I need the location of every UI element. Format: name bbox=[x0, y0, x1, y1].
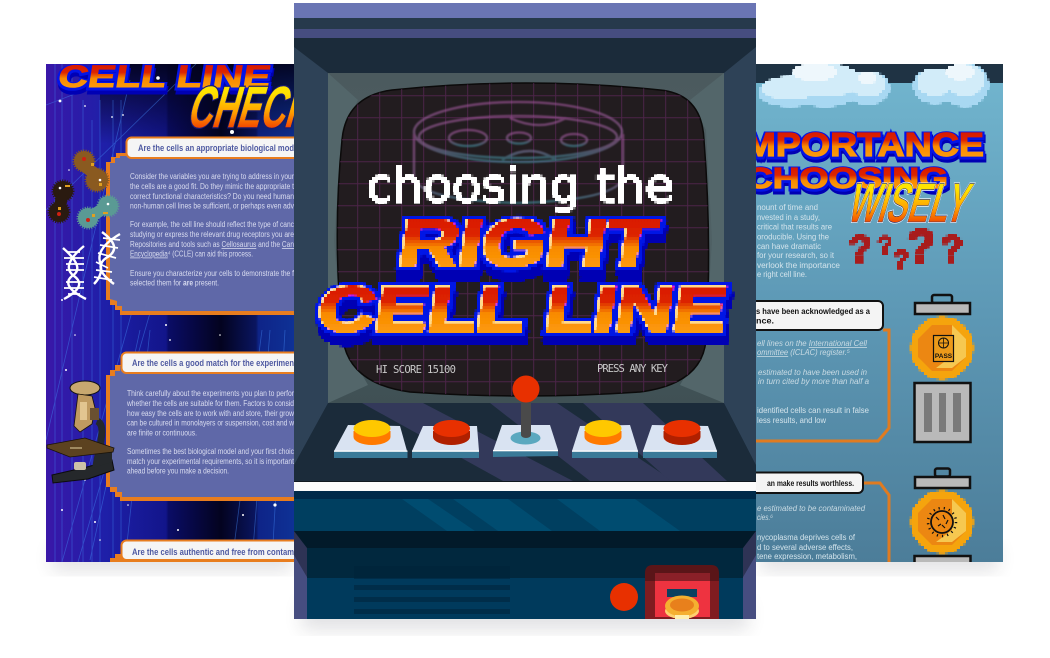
icon: red indicator dot bbox=[610, 583, 638, 611]
callout: misidentified cells: ommittee (ICLAC) register.⁵ bbox=[757, 348, 850, 357]
icon: bin with microbe coin bbox=[910, 468, 974, 576]
heading: IMPORTANCE / CHOOSING: CHOOSING bbox=[746, 164, 948, 196]
icon: pixel clouds bbox=[758, 63, 989, 107]
card: experimental match: Sometimes the best biological model and your first choic bbox=[127, 447, 294, 456]
text: press any key: PRESS ANY KEY bbox=[597, 363, 669, 375]
white divider band bbox=[294, 481, 756, 492]
shadows under the three posters bbox=[52, 545, 998, 630]
heading: CELL LINE: CELL LINE bbox=[57, 64, 274, 99]
card: authentic and contamination-free: Are the cells authentic and free from contam bbox=[132, 547, 294, 557]
heading: checklist script: CHECK bbox=[182, 74, 323, 140]
callout: misidentified cells: less results, and low bbox=[757, 416, 826, 425]
monitor bezel bbox=[328, 73, 724, 403]
heading: IMPORTANCE / CHOOSING: CHOOSING bbox=[747, 167, 949, 199]
text: intro paragraph: can have dramatic bbox=[757, 242, 821, 251]
icon: bin with passport coin bbox=[910, 295, 974, 442]
heading: CELL LINE: CELL LINE bbox=[315, 285, 734, 355]
card: experimental match bbox=[106, 352, 302, 501]
card: experimental match: how easy the cells are to work with and store, their grow bbox=[127, 409, 294, 418]
heading: choosing the: choosing the bbox=[366, 159, 674, 214]
icon: microscope bbox=[47, 381, 114, 483]
grille bbox=[354, 578, 510, 614]
heading: IMPORTANCE / CHOOSING: IMPORTANCE bbox=[735, 130, 985, 167]
card: experimental match: are finite or continuous. bbox=[127, 428, 197, 438]
callout: misidentified cells: nce. bbox=[756, 316, 774, 326]
card: biological model bbox=[106, 138, 302, 315]
icon: question marks: ? bbox=[877, 232, 893, 260]
icon: question marks bbox=[849, 228, 963, 270]
card: biological model: Repositories and tools such as Cellosaurus and the Can bbox=[130, 240, 294, 249]
card: biological model: studying or express the relevant drug receptors you are bbox=[130, 230, 294, 239]
icon: bacteria bbox=[49, 151, 118, 228]
callout: contamination: e estimated to be contaminated bbox=[757, 504, 866, 513]
panel: cell line checklist poster (left) bbox=[46, 64, 294, 562]
cabinet top bands bbox=[294, 3, 756, 403]
card: biological model: non-human cell lines be sufficient, or perhaps even adv bbox=[130, 202, 294, 210]
text: intro paragraph: for your research, so it bbox=[757, 251, 835, 260]
card: biological model: correct functional characteristics? Do you need human bbox=[130, 192, 294, 201]
card: biological model: selected them for are present. bbox=[130, 278, 219, 288]
heading: RIGHT: RIGHT bbox=[394, 207, 663, 281]
card: authentic and contamination-free bbox=[110, 540, 302, 562]
callout: misidentified cells: s have been acknowledged as a bbox=[756, 306, 870, 316]
icon: question marks: ? bbox=[848, 229, 872, 271]
lower cabinet bbox=[294, 491, 756, 619]
callout: contamination: nycoplasma deprives cells of bbox=[757, 533, 856, 542]
callout: misidentified cells: ell lines on the International Cell bbox=[757, 339, 867, 348]
heading: IMPORTANCE / CHOOSING: IMPORTANCE bbox=[734, 126, 984, 163]
card: experimental match: Think carefully about the experiments you plan to perfor bbox=[127, 389, 294, 398]
card: experimental match: Are the cells a good match for the experimen bbox=[132, 358, 294, 368]
panel: arcade cabinet poster (centre) bbox=[294, 3, 756, 619]
icon: question marks: ? bbox=[940, 229, 964, 271]
button: yellow 3 bbox=[572, 420, 638, 458]
heading: CELL LINE: CELL LINE bbox=[314, 280, 733, 350]
text: intro paragraph: nvested in a study, bbox=[757, 213, 820, 222]
callout: contamination: an make results worthless. bbox=[767, 478, 854, 488]
callout: contamination: tene expression, metabolism, bbox=[757, 552, 857, 561]
button: red 4 bbox=[643, 420, 717, 458]
heading: RIGHT: RIGHT bbox=[394, 207, 662, 281]
callout: contamination: d to several adverse effects, bbox=[757, 543, 853, 552]
card: biological model: Are the cells an appropriate biological mod bbox=[138, 143, 294, 153]
heading: RIGHT: RIGHT bbox=[396, 217, 664, 291]
callout: misidentified cells: in turn cited by more than half a bbox=[758, 377, 870, 386]
heading: IMPORTANCE / CHOOSING: CHOOSING bbox=[746, 163, 948, 195]
text: hi score: HI SCORE 15100 bbox=[376, 364, 456, 376]
text: intro paragraph: critical that results are bbox=[757, 222, 832, 232]
heading: CELL LINE: CELL LINE bbox=[313, 275, 732, 345]
icon: question marks: ? bbox=[906, 221, 936, 274]
button: red 2 bbox=[412, 420, 479, 458]
icon: question marks: ? bbox=[893, 246, 909, 274]
card: biological model: Consider the variables you are trying to address in your bbox=[130, 172, 294, 181]
card: biological model: For example, the cell line should reflect the type of canc bbox=[130, 220, 294, 229]
text: intro paragraph: verlook the importance bbox=[757, 261, 840, 270]
card: experimental match: ahead before you make a decision. bbox=[127, 466, 229, 476]
heading: CELL LINE: CELL LINE bbox=[56, 60, 273, 95]
icon: DNA helices bbox=[63, 232, 120, 299]
callout: misidentified cells: estimated to have been used in bbox=[758, 368, 867, 377]
joystick bbox=[493, 376, 558, 457]
icon: bin with passport coin: PASS bbox=[935, 353, 953, 360]
button: yellow 1 bbox=[334, 420, 408, 458]
callout: contamination bbox=[746, 472, 889, 562]
callout: misidentified cells: identified cells can result in false bbox=[757, 406, 869, 415]
heading: RIGHT: RIGHT bbox=[395, 212, 663, 286]
callout: misidentified cells bbox=[746, 301, 889, 441]
heading: CELL LINE: CELL LINE bbox=[56, 59, 273, 94]
text: intro paragraph: oroducible. Using the bbox=[757, 232, 829, 242]
arcade screen bbox=[312, 80, 734, 400]
heading: CELL LINE: CELL LINE bbox=[312, 274, 731, 344]
heading: checklist script bbox=[190, 85, 294, 129]
card: biological model: Encyclopedia⁴ (CCLE) can aid this process. bbox=[130, 250, 253, 258]
heading: WISELY script bbox=[850, 182, 976, 224]
heading: checklist script: CHECK bbox=[182, 74, 323, 140]
text: intro paragraph: nount of time and bbox=[757, 203, 818, 212]
card: experimental match: can be cultured in monolayers or suspension, cost and w bbox=[127, 418, 294, 428]
stars bbox=[59, 76, 277, 541]
heading: RIGHT: RIGHT bbox=[393, 206, 661, 280]
control panel bbox=[362, 403, 727, 481]
heading: CELL LINE bbox=[56, 64, 275, 95]
text: intro paragraph: e right cell line. bbox=[757, 270, 807, 279]
text: intro paragraph bbox=[757, 203, 840, 279]
heading: IMPORTANCE / CHOOSING: IMPORTANCE bbox=[734, 127, 984, 164]
card: biological model: the cells are a good fit. Do they mimic the appropriate t bbox=[130, 182, 295, 191]
card: experimental match: match your experimental requirements, so it is important bbox=[127, 457, 295, 466]
heading: IMPORTANCE / CHOOSING bbox=[756, 128, 986, 195]
card: experimental match: whether the cells are suitable for them. Factors to consid bbox=[126, 399, 294, 408]
heading: CELL LINE: CELL LINE bbox=[313, 275, 732, 345]
card: biological model: Ensure you characterize your cells to demonstrate the f bbox=[130, 269, 295, 278]
callout: contamination: cies.⁶ bbox=[757, 513, 774, 522]
icon: faint petri dish bbox=[414, 102, 623, 203]
coin slot bbox=[645, 565, 719, 619]
panel: importance of choosing wisely poster (right) bbox=[756, 64, 1003, 562]
